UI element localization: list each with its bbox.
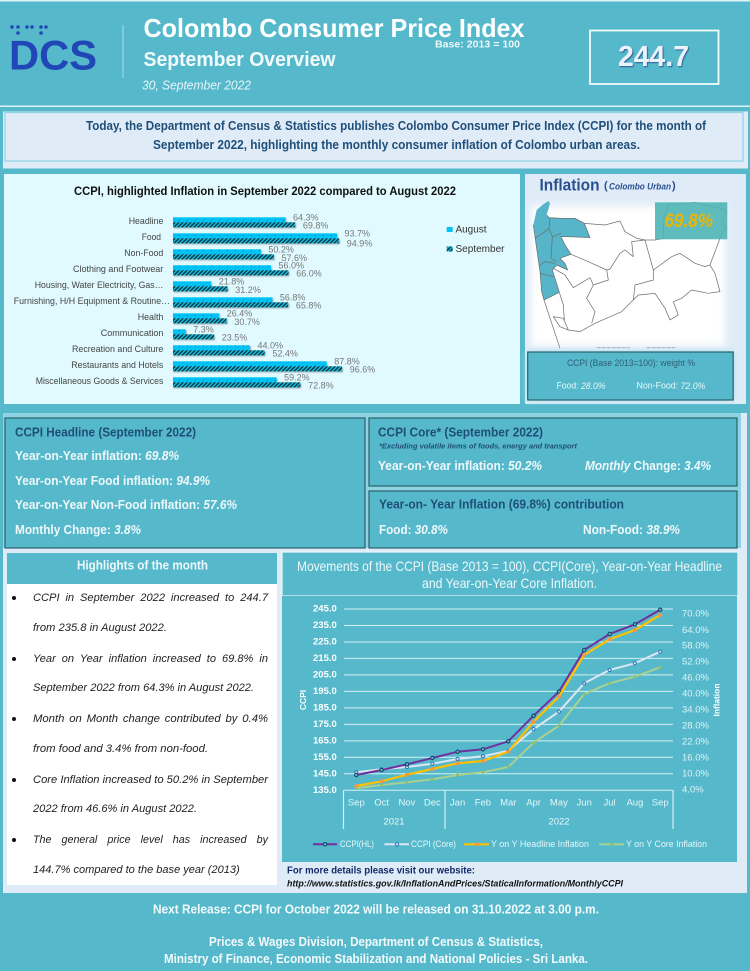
highlight: general price level: The general price level has increased by bbox=[33, 834, 269, 846]
August value labels: 59.2% bbox=[284, 373, 310, 383]
month labels: Jul bbox=[604, 798, 616, 808]
highlight: core inflation bbox=[12, 774, 269, 815]
footer: Next Release: CCPI for October 2022 will be released on 31.10.2022 at 3.00 p.m. bbox=[153, 902, 599, 916]
bar chart legend: August bbox=[456, 224, 487, 236]
panel: introduction bbox=[3, 112, 748, 168]
base note: Base: 2013 = 100 bbox=[435, 40, 520, 50]
panel: highlights of the month bbox=[7, 553, 277, 885]
left axis labels: 185.0 bbox=[313, 702, 337, 713]
panel: inflation contribution: Non-Food: 38.9% bbox=[583, 523, 680, 537]
date: 30, September 2022 bbox=[142, 78, 252, 92]
month labels: Nov bbox=[398, 798, 416, 808]
September value labels: 57.6% bbox=[282, 253, 307, 263]
panel: CCPI headline: Year-on-Year Food inflation: 94.9% bbox=[15, 474, 210, 488]
left axis labels: 175.0 bbox=[313, 719, 337, 730]
category labels: Food bbox=[142, 232, 161, 243]
September bars bbox=[173, 222, 342, 387]
headline index box bbox=[590, 30, 718, 84]
category labels: Communication bbox=[101, 328, 163, 339]
category labels: Non-Food bbox=[124, 248, 163, 259]
August bars bbox=[173, 217, 337, 382]
highlights heading bbox=[7, 553, 277, 584]
right axis labels: 52.0% bbox=[682, 656, 709, 668]
line: CCPI headline bbox=[355, 608, 662, 777]
September value labels: 52.4% bbox=[272, 348, 298, 358]
subtitle: September Overview bbox=[144, 49, 336, 71]
right axis labels: 22.0% bbox=[682, 736, 709, 748]
month labels bbox=[348, 798, 669, 828]
September value labels: 96.6% bbox=[350, 364, 375, 374]
highlight: CCPI level: from 235.8 in August 2022. bbox=[33, 622, 167, 634]
left axis labels bbox=[313, 604, 337, 796]
August value labels: 7.3% bbox=[193, 325, 214, 335]
panel: inflation contribution: Food: 30.8% bbox=[379, 523, 448, 537]
highlight: year on year inflation: Year on Year inflation increased to 69.8% in bbox=[33, 653, 268, 665]
panel: inflation map bbox=[525, 174, 746, 404]
September value labels bbox=[222, 220, 375, 390]
August value labels: 56.8% bbox=[280, 293, 305, 303]
footer bbox=[0, 893, 750, 971]
line chart legend: CCPI (Core) bbox=[411, 839, 456, 850]
August value labels: 44.0% bbox=[258, 341, 283, 351]
headline index box: 244.7 bbox=[618, 41, 689, 73]
panel: introduction: September 2022, highlighting the monthly consumer inflation of Colombo urban areas. bbox=[153, 138, 640, 152]
August value labels: 87.8% bbox=[334, 357, 360, 367]
September value labels: 66.0% bbox=[296, 268, 322, 278]
September value labels: 30.7% bbox=[234, 317, 260, 327]
right axis labels: 16.0% bbox=[682, 752, 709, 764]
panel: inflation contribution: Year-on- Year Inflation (69.8%) contribution bbox=[379, 496, 624, 512]
line chart legend: CCPI(HL) bbox=[340, 839, 374, 850]
line: Y on Y headline inflation bbox=[354, 613, 662, 788]
line chart legend: Y on Y Headline Inflation bbox=[491, 839, 589, 850]
highlight: CCPI level: CCPI in September 2022 increased to 244.7 bbox=[33, 592, 269, 604]
highlight: month on month change: Month on Month change contributed by 0.4% bbox=[33, 713, 268, 725]
line chart legend: Y on Y Core Inflation bbox=[626, 839, 707, 850]
panel: CCPI core: Monthly Change: 3.4% bbox=[585, 459, 711, 473]
right axis labels bbox=[682, 608, 709, 796]
September value labels: 72.8% bbox=[308, 380, 334, 390]
month labels: Jun bbox=[577, 798, 592, 808]
month labels: Sep bbox=[348, 798, 365, 808]
panel: inflation contribution bbox=[369, 491, 737, 548]
website note: http://www.statistics.gov.lk/InflationAndPrices/StaticalInformation/MonthlyCCPI bbox=[287, 878, 623, 890]
axis title: Inflation: Inflation bbox=[712, 683, 722, 717]
icon: DCS logo: DCS bbox=[9, 32, 97, 78]
right axis labels: 10.0% bbox=[682, 768, 709, 780]
left axis labels: 155.0 bbox=[313, 752, 337, 763]
footer: Ministry of Finance, Economic Stabilization and National Policies - Sri Lanka. bbox=[164, 952, 588, 966]
right axis labels: 64.0% bbox=[682, 625, 709, 636]
highlight: year on year inflation bbox=[12, 653, 268, 694]
panel: CCPI headline bbox=[5, 418, 365, 548]
August value labels: 64.3% bbox=[293, 213, 319, 223]
map heading: Colombo Urban bbox=[609, 182, 671, 192]
highlight: general price level: 144.7% compared to the base year (2013) bbox=[33, 864, 240, 876]
panel: CCPI core: CCPI Core* (September 2022) bbox=[378, 424, 543, 440]
September value labels: 94.9% bbox=[347, 238, 372, 248]
August value labels: 50.2% bbox=[268, 245, 294, 255]
line: Y on Y core inflation bbox=[355, 666, 662, 790]
map heading: ( bbox=[604, 180, 608, 192]
lower page background bbox=[3, 413, 747, 893]
category labels: Furnishing, H/H Equipment & Routine… bbox=[14, 296, 170, 307]
month labels: Apr bbox=[526, 798, 541, 808]
footer: Prices & Wages Division, Department of Census & Statistics, bbox=[209, 935, 543, 949]
month labels: 2022 bbox=[548, 816, 570, 828]
right axis labels: 46.0% bbox=[682, 672, 709, 684]
panel: CCPI weights bbox=[527, 352, 733, 400]
highlight: general price level bbox=[12, 834, 269, 876]
category labels: Miscellaneous Goods & Services bbox=[36, 376, 164, 387]
line chart legend bbox=[313, 839, 707, 850]
right axis labels: 28.0% bbox=[682, 720, 709, 732]
map heading: Inflation bbox=[540, 176, 600, 194]
panel: CCPI movements chart heading bbox=[282, 552, 738, 596]
right axis labels: 4.0% bbox=[682, 784, 704, 796]
month labels: 2021 bbox=[383, 816, 405, 828]
September value labels: 69.8% bbox=[303, 220, 328, 230]
month labels: Sep bbox=[652, 798, 669, 808]
website note: For more details please visit our website: bbox=[287, 865, 475, 877]
left axis labels: 235.0 bbox=[313, 620, 337, 631]
category labels: Housing, Water Electricity, Gas… bbox=[35, 280, 163, 291]
panel: bar chart of inflation by category bbox=[4, 174, 520, 404]
left axis labels: 215.0 bbox=[313, 653, 337, 664]
left axis labels: 145.0 bbox=[313, 768, 337, 779]
month labels: Oct bbox=[374, 798, 389, 808]
category labels: Headline bbox=[129, 216, 163, 227]
month labels: Aug bbox=[626, 798, 643, 808]
header band bbox=[0, 0, 750, 107]
category labels: Restaurants and Hotels bbox=[71, 360, 164, 371]
left axis labels: 225.0 bbox=[313, 636, 337, 648]
line: CCPI core bbox=[355, 650, 662, 774]
August value labels: 26.4% bbox=[227, 309, 252, 319]
category labels: Health bbox=[138, 312, 163, 323]
title: Colombo Consumer Price Index bbox=[144, 13, 525, 43]
highlight: core inflation: Core Inflation increased to 50.2% in September bbox=[33, 774, 269, 786]
left axis labels: 205.0 bbox=[313, 669, 337, 680]
highlight: CCPI level bbox=[12, 592, 269, 634]
panel: CCPI headline: CCPI Headline (September 2022) bbox=[15, 424, 196, 440]
month labels: May bbox=[550, 798, 568, 808]
category labels: Clothing and Footwear bbox=[73, 264, 163, 275]
month labels: Mar bbox=[500, 798, 516, 808]
August value labels: 93.7% bbox=[344, 229, 370, 239]
August value labels bbox=[193, 213, 370, 383]
left axis labels: 165.0 bbox=[313, 735, 337, 746]
highlight: year on year inflation: September 2022 from 64.3% in August 2022. bbox=[33, 682, 254, 694]
category labels bbox=[14, 216, 170, 387]
panel: CCPI movements chart heading: and Year-on-Year Core Inflation. bbox=[422, 575, 597, 591]
panel: CCPI core bbox=[369, 418, 737, 486]
August value labels: 21.8% bbox=[219, 277, 244, 287]
September value labels: 31.2% bbox=[235, 285, 261, 295]
panel: CCPI core: *Excluding volatile items of foods, energy and transport bbox=[379, 442, 577, 450]
highlight: month on month change bbox=[12, 713, 268, 755]
right axis labels: 70.0% bbox=[682, 608, 709, 620]
bar chart title: CCPI, highlighted Inflation in September 2022 compared to August 2022 bbox=[74, 184, 456, 198]
panel: introduction: Today, the Department of Census & Statistics publishes Colombo Consumer Price Index (CCPI) for the month of bbox=[86, 119, 707, 133]
category labels: Recreation and Culture bbox=[72, 344, 163, 355]
map heading: ) bbox=[672, 180, 676, 192]
right axis labels: 58.0% bbox=[682, 640, 709, 652]
right axis labels: 40.0% bbox=[682, 688, 709, 700]
map heading bbox=[540, 176, 676, 194]
September value labels: 23.5% bbox=[222, 332, 247, 342]
panel: CCPI weights: Food: 28.0% bbox=[556, 380, 606, 392]
callout: Colombo inflation rate: 69.8% bbox=[664, 211, 713, 232]
month labels: Jan bbox=[450, 798, 465, 808]
axis title: CCPI: CCPI bbox=[298, 690, 308, 710]
right axis labels: 34.0% bbox=[682, 704, 709, 716]
bar chart legend: September bbox=[456, 243, 505, 255]
left axis labels: 245.0 bbox=[313, 604, 337, 614]
left axis labels: 135.0 bbox=[313, 785, 337, 796]
panel: CCPI headline: Monthly Change: 3.8% bbox=[15, 523, 141, 537]
highlight: core inflation: 2022 from 46.6% in August 2022. bbox=[32, 803, 197, 815]
highlight: month on month change: from food and 3.4% from non-food. bbox=[33, 743, 208, 755]
website note bbox=[287, 865, 623, 890]
bar chart legend bbox=[447, 224, 505, 255]
panel: CCPI weights: CCPI (Base 2013=100): weight % bbox=[567, 358, 695, 368]
highlights heading: Highlights of the month bbox=[77, 558, 208, 572]
panel: CCPI headline: Year-on-Year Non-Food inflation: 57.6% bbox=[15, 498, 237, 512]
panel: CCPI core: Year-on-Year inflation: 50.2% bbox=[378, 459, 542, 473]
month labels: Dec bbox=[424, 798, 441, 808]
panel: CCPI weights: Non-Food: 72.0% bbox=[636, 380, 706, 392]
callout: Colombo inflation rate bbox=[655, 202, 727, 239]
panel: line chart bbox=[282, 596, 737, 862]
left axis labels: 195.0 bbox=[313, 686, 337, 697]
August value labels: 56.0% bbox=[278, 261, 304, 271]
month labels: Feb bbox=[475, 798, 491, 808]
map: Colombo urban districts bbox=[533, 201, 727, 348]
September value labels: 65.8% bbox=[296, 300, 321, 310]
panel: CCPI headline: Year-on-Year inflation: 69.8% bbox=[15, 449, 179, 463]
